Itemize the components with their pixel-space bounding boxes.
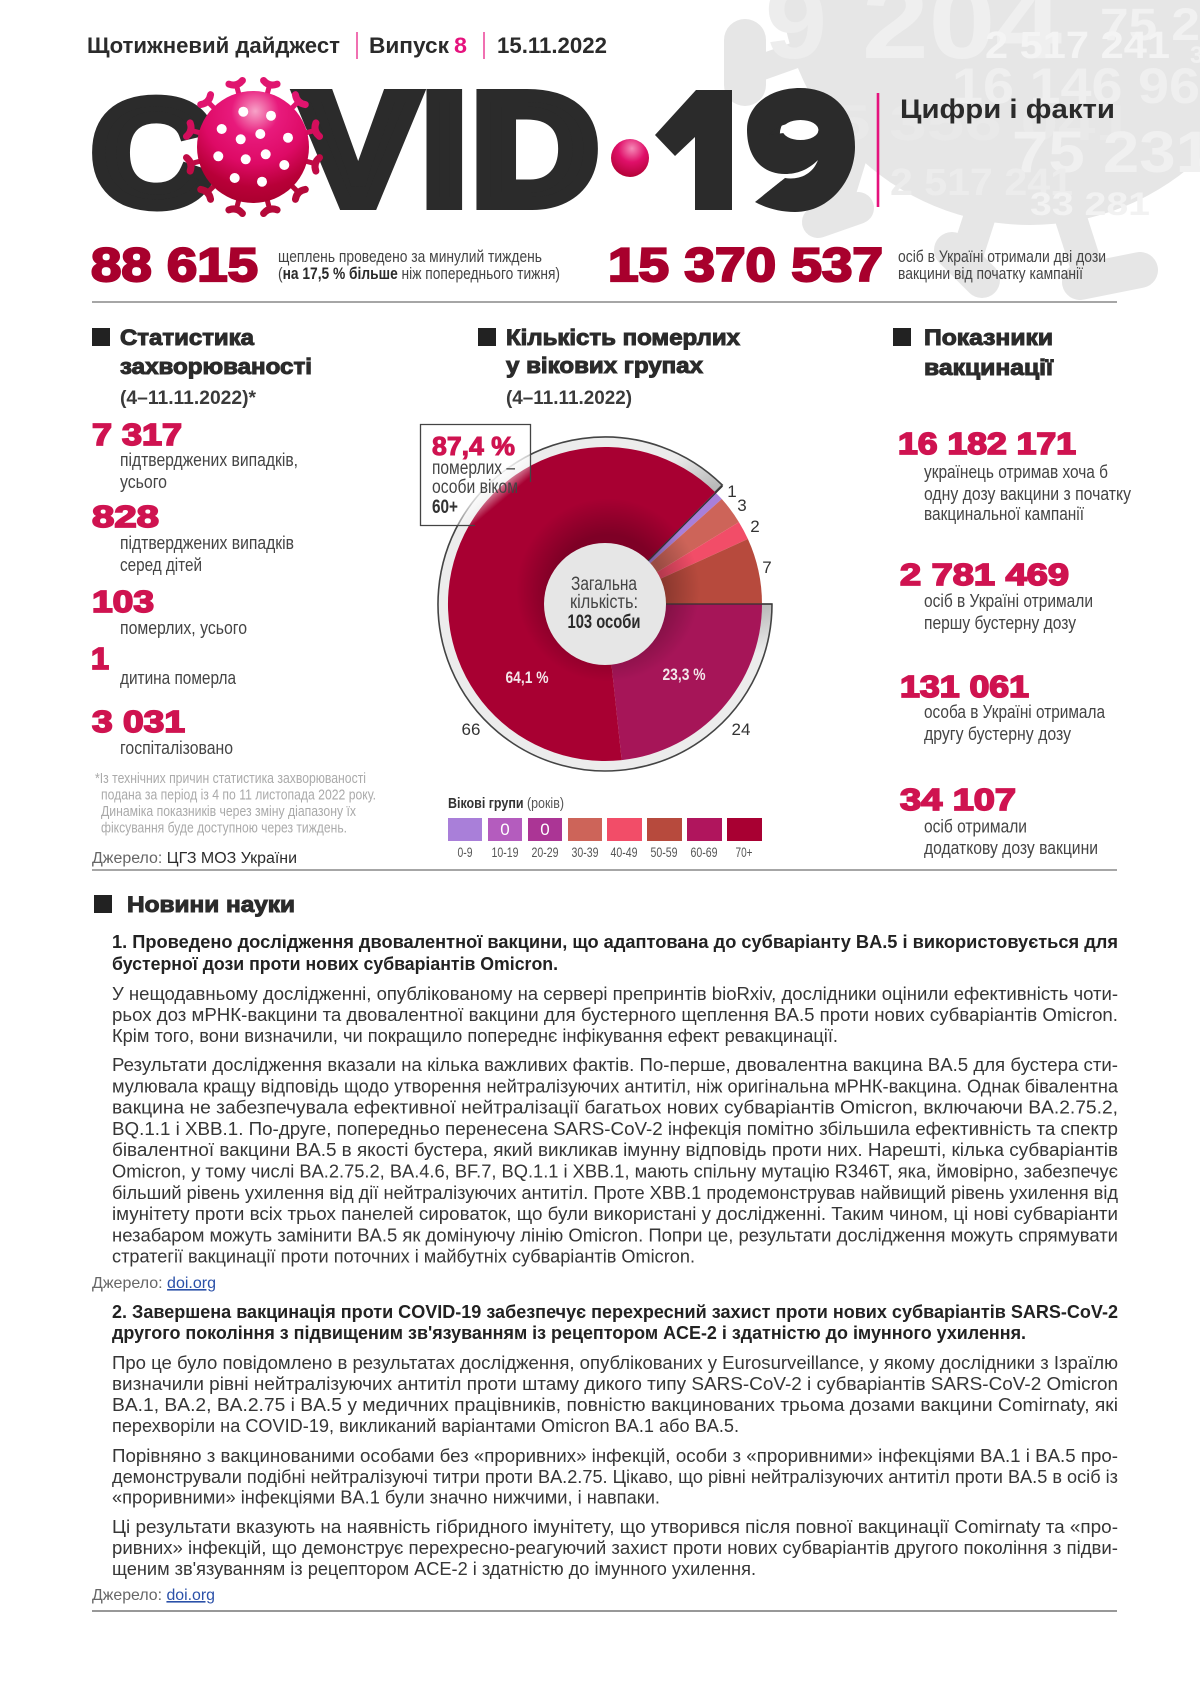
background virus with faded numbers <box>745 0 1200 282</box>
legend: age groups: 70+ <box>736 844 752 860</box>
article 2 paragraph 3: Ці результати вказують на наявність гібридного імунітету, що утворився після повної вакцинації Comirnaty та «про- <box>112 1516 1118 1537</box>
stat: confirmed cases: підтверджених випадків, <box>120 450 298 470</box>
legend: age groups: 0 <box>500 820 510 839</box>
logo: COVID-19 <box>92 77 855 217</box>
key figures row: (на 17,5 % більше ніж попереднього тижня) <box>278 265 560 283</box>
stat: hospitalised: госпіталізовано <box>120 738 233 758</box>
legend: age groups: 40-49 <box>610 844 638 860</box>
stat: child deaths: 1 <box>91 641 109 676</box>
background virus with faded numbers: 75 2 <box>1100 0 1200 50</box>
article 2 paragraph 3 <box>112 1516 1118 1579</box>
stat: at least one dose: вакцинальної кампанії <box>924 504 1084 524</box>
background virus with faded numbers: 2 517 241 <box>985 25 1170 67</box>
heading: deaths by age: Кількість померлих <box>506 325 741 350</box>
stat: first booster: осіб в Україні отримали <box>924 591 1093 611</box>
callout: 87.4 %: особи віком <box>432 477 518 498</box>
heading: morbidity statistics: (4–11.11.2022)* <box>120 387 256 409</box>
article 1 paragraph 2: стратегії вакцинації проти поточних і майбутніх субваріантів Omicron. <box>112 1246 695 1267</box>
stat: second booster <box>900 669 1106 744</box>
article 1 paragraph 2: незабаром можуть замінити BA.5 як домінуючу лінію Omicron. Попри це, результати дослідження можуть спрямувати <box>112 1224 1118 1245</box>
background virus with faded numbers: 75 231 <box>1012 120 1200 185</box>
pie chart: 23,3 % <box>662 666 706 684</box>
stat: at least one dose: українець отримав хоча б <box>924 462 1108 482</box>
article 2 <box>92 1301 1118 1604</box>
article 2 paragraph 2: «проривними» інфекціями BA.1 були значно нижчими, і навпаки. <box>112 1486 660 1508</box>
digest header line: 15.11.2022 <box>497 33 607 58</box>
stat: additional dose: осіб отримали <box>924 816 1027 836</box>
key figures row: осіб в Україні отримали дві дози <box>898 248 1106 266</box>
footnote: *Із технічних причин статистика захворюваності <box>95 770 366 787</box>
stat: cases among children <box>92 499 294 575</box>
legend: age groups: 0 <box>540 820 550 839</box>
pie chart: 24 <box>732 720 750 739</box>
footnote: фіксування буде доступною через тиждень. <box>101 820 347 836</box>
stat: deaths: померлих, усього <box>120 618 247 638</box>
article 1 paragraph 1 <box>112 983 1118 1046</box>
panel: vaccination indicators <box>893 325 1131 858</box>
stat: additional dose: додаткову дозу вакцини <box>924 838 1098 858</box>
digest header line: Щотижневий дайджест <box>87 33 340 58</box>
heading: vaccination <box>893 325 1054 380</box>
article 2 paragraph 2 <box>112 1445 1118 1508</box>
legend: age groups: 20-29 <box>532 844 559 860</box>
article 2 paragraph 2: демонстрували подібні нейтралізуючі титри проти BA.2.75. Цікаво, що рівні нейтралізуючих антитіл проти BA.5 в осіб із <box>112 1466 1118 1487</box>
pie chart: Загальна <box>571 574 637 595</box>
article 1 paragraph 2: бівалентної вакцини BA.5 в якості бустера, який викликав імунну відповідь проти них. Нарешті, кілька субваріантів <box>112 1139 1118 1160</box>
legend: age groups: Вікові групи (років) <box>448 795 564 812</box>
logo: COVID-19: D <box>472 62 598 238</box>
logo: COVID-19: C <box>92 71 213 236</box>
stat: additional dose <box>900 782 1098 858</box>
footnote <box>95 770 376 836</box>
pie chart: 103 особи <box>568 612 640 633</box>
pie chart: 2 <box>750 517 760 536</box>
legend: age groups: 30-39 <box>572 844 599 860</box>
article 2 paragraph 1: Про це було повідомлено в результатах дослідження, опублікованих у Eurosurveillance, у якому дослідники з Ізраїлю <box>112 1352 1118 1373</box>
logo: COVID-19: V <box>299 62 417 238</box>
stat: at least one dose: 16 182 171 <box>898 426 1076 461</box>
article 2 title <box>112 1301 1118 1343</box>
digest header line: Випуск <box>369 33 450 58</box>
footnote: подана за період із 4 по 11 листопада 2022 року. <box>101 786 376 804</box>
article 1 paragraph 2: BQ.1.1 і XBB.1. По-друге, попередньо перенесена SARS-CoV-2 інфекція помітно збільшила ефективність та спектр <box>112 1118 1118 1139</box>
callout: 87.4 %: 87,4 % <box>432 431 515 461</box>
pie chart: кількість: <box>570 592 638 613</box>
stat: child deaths: дитина померла <box>120 668 237 688</box>
legend: age groups: 50-59 <box>650 844 678 860</box>
key figures row: 15 370 537 <box>608 238 883 291</box>
stat: at least one dose <box>898 426 1131 524</box>
stat: cases among children: серед дітей <box>120 555 202 575</box>
digest header line <box>87 32 607 59</box>
stat: deaths: 103 <box>92 584 154 619</box>
article 1 paragraph 2: мулювала кращу відповідь щодо утворення нейтралізуючих антитіл, ніж оригінальна мРНК-вакцина. Однак бівалентна <box>112 1075 1119 1096</box>
heading: deaths by age: (4–11.11.2022) <box>506 387 632 409</box>
callout: 87.4 % <box>420 424 530 526</box>
stat: at least one dose: одну дозу вакцини з початку <box>924 484 1131 504</box>
stat: first booster <box>900 557 1093 633</box>
logo: COVID-19: I <box>422 62 466 238</box>
article 1 <box>92 931 1119 1292</box>
article 1 title: 1. Проведено дослідження двовалентної вакцини, що адаптована до субваріанту BA.5 і використовується для <box>112 931 1118 952</box>
stat: second booster: 131 061 <box>900 669 1029 704</box>
article 1 source: Джерело: doi.org <box>92 1275 216 1292</box>
key figures row: щеплень проведено за минулий тиждень <box>278 248 542 266</box>
pie chart: 7 <box>762 558 772 577</box>
heading: vaccination: Показники <box>924 325 1053 350</box>
stat: confirmed cases: 7 317 <box>92 417 182 452</box>
stat: deaths <box>92 584 247 638</box>
background virus with faded numbers: 2 517 241 <box>890 162 1073 204</box>
key figures row: 88 615 <box>91 238 258 291</box>
article 2 paragraph 1 <box>112 1352 1118 1436</box>
article 1 paragraph 2: Omicron, у тому числі BA.2.75.2, BA.4.6, BF.7, BQ.1.1 і XBB.1, мають спільну мутацію R346T, яка, ймовірно, забезпечує <box>112 1160 1118 1182</box>
pie chart: 64,1 % <box>506 669 549 687</box>
pie chart: 1 <box>727 482 737 501</box>
pie chart: 66 <box>462 720 480 739</box>
stat: confirmed cases: усього <box>120 472 167 492</box>
stat: hospitalised <box>92 704 233 758</box>
article 1 paragraph 2: імунітету проти всіх трьох панелей сироваток, що були використані у дослідженні. Таким чином, ці нові субваріанти <box>112 1203 1118 1224</box>
legend: age groups <box>448 795 762 860</box>
article 2 paragraph 3: ривних» інфекцій, що демонструє перехресно-реагуючий захист проти нових субваріантів другого покоління з підви- <box>112 1537 1118 1558</box>
article 1 title <box>112 931 1118 974</box>
heading: morbidity statistics: Статистика <box>120 325 255 350</box>
pie chart: 3 <box>737 496 747 515</box>
article 2 paragraph 1: BA.1, BA.2, BA.2.75 і BA.5 у медичних працівників, повністю вакцинованих трьома дозами вакцини Comirnaty, які <box>112 1394 1118 1415</box>
article 1 title: бустерної дози проти нових субваріантів Omicron. <box>112 953 558 974</box>
stat: cases among children: підтверджених випадків <box>120 533 294 553</box>
source: morbidity: Джерело: ЦГЗ МОЗ України <box>92 850 297 867</box>
legend: age groups: 10-19 <box>492 844 519 860</box>
article 2 title: другого покоління з підвищеним зв'язуванням із рецептором ACE-2 і здатністю до імунного ухилення. <box>112 1322 1026 1343</box>
stat: first booster: першу бустерну дозу <box>924 613 1076 633</box>
footnote: Динаміка показників через зміну діапазону їх <box>101 803 356 820</box>
stat: additional dose: 34 107 <box>900 782 1016 817</box>
legend: age groups: 0-9 <box>458 844 473 860</box>
article 2 paragraph 1: визначили рівні нейтралізуючих антитіл проти штаму дикого типу SARS-CoV-2 і субваріантів SARS-CoV-2 Omicron <box>112 1373 1118 1394</box>
stat: cases among children: 828 <box>92 499 159 534</box>
stat: hospitalised: 3 031 <box>92 704 185 739</box>
article 1 paragraph 1: Крім того, вони визначили, чи покращило попереднє інфікування ефект ревакцинації. <box>112 1025 838 1046</box>
background virus with faded numbers: 16 146 96 <box>952 58 1200 114</box>
heading: deaths by age <box>478 325 741 409</box>
digest header line: 8 <box>454 33 467 58</box>
heading: morbidity statistics <box>92 325 312 409</box>
article 2 title: 2. Завершена вакцинація проти COVID-19 забезпечує перехресний захист проти нових субваріантів SARS-CoV-2 <box>112 1301 1118 1322</box>
article 1 paragraph 2: Результати дослідження вказали на кілька важливих фактів. По-перше, двовалентна вакцина BA.5 для бустера сти- <box>112 1054 1118 1075</box>
icon: virus <box>186 80 320 214</box>
stat: second booster: другу бустерну дозу <box>924 724 1071 744</box>
background virus with faded numbers: 5 356 041 <box>833 95 1133 151</box>
article 1 paragraph 2: вакцина не забезпечувала ефективної нейтралізації багатьох нових субваріантів Omicron, включаючи BA.2.75.2, <box>112 1097 1118 1118</box>
article 2 paragraph 3: щеним зв'язуванням із рецептором ACE-2 і здатністю до імунного ухилення. <box>112 1558 756 1579</box>
panel: deaths by age group <box>420 325 772 860</box>
heading: morbidity statistics: захворюваності <box>120 354 312 379</box>
stat: child deaths <box>91 641 237 688</box>
heading: science news: Новини науки <box>127 892 295 917</box>
panel: morbidity statistics <box>91 325 376 867</box>
legend: age groups: 60-69 <box>690 844 718 860</box>
subtitle: Цифри і факти: Цифри і факти <box>900 94 1115 124</box>
article 1 paragraph 2 <box>112 1054 1119 1267</box>
article 1 paragraph 2: більший рівень ухилення від дії нейтралізуючих антитіл. Проте XBB.1 продемонстрував найвищий рівень ухилення від <box>112 1182 1118 1203</box>
heading: deaths by age: у вікових групах <box>506 353 704 378</box>
heading: vaccination: вакцинації <box>924 355 1054 380</box>
pie chart <box>438 437 772 771</box>
article 2 paragraph 1: перехворіли на COVID-19, викликаний варіантами Omicron BA.1 або BA.5. <box>112 1415 739 1436</box>
article 1 paragraph 1: рьох доз мРНК-вакцини та двовалентної вакцини для бустерного щеплення BA.5 проти нових субваріантів Omicron. <box>112 1004 1118 1025</box>
logo: COVID-19: 1 <box>668 62 749 238</box>
key figures row: вакцини від початку кампанії <box>898 265 1083 283</box>
callout: 87.4 %: 60+ <box>432 497 458 518</box>
article 1 paragraph 1: У нещодавньому дослідженні, опублікованому на сервері препринтів bioRxiv, дослідники оцінили ефективність чоти- <box>112 983 1118 1004</box>
key figures row <box>91 238 1106 291</box>
icon: logo dot <box>611 139 649 177</box>
stat: first booster: 2 781 469 <box>900 557 1069 592</box>
stat: second booster: особа в Україні отримала <box>924 702 1106 722</box>
article 2 paragraph 2: Порівняно з вакцинованими особами без «проривних» інфекцій, особи з «проривними» інфекціями BA.1 і BA.5 про- <box>112 1445 1118 1466</box>
background virus with faded numbers: 33 281 <box>1030 186 1150 222</box>
callout: 87.4 %: померлих – <box>432 458 515 479</box>
logo: COVID-19: 9 <box>746 71 854 236</box>
stat: confirmed cases <box>92 417 298 492</box>
article 2 source: Джерело: doi.org <box>92 1587 215 1604</box>
